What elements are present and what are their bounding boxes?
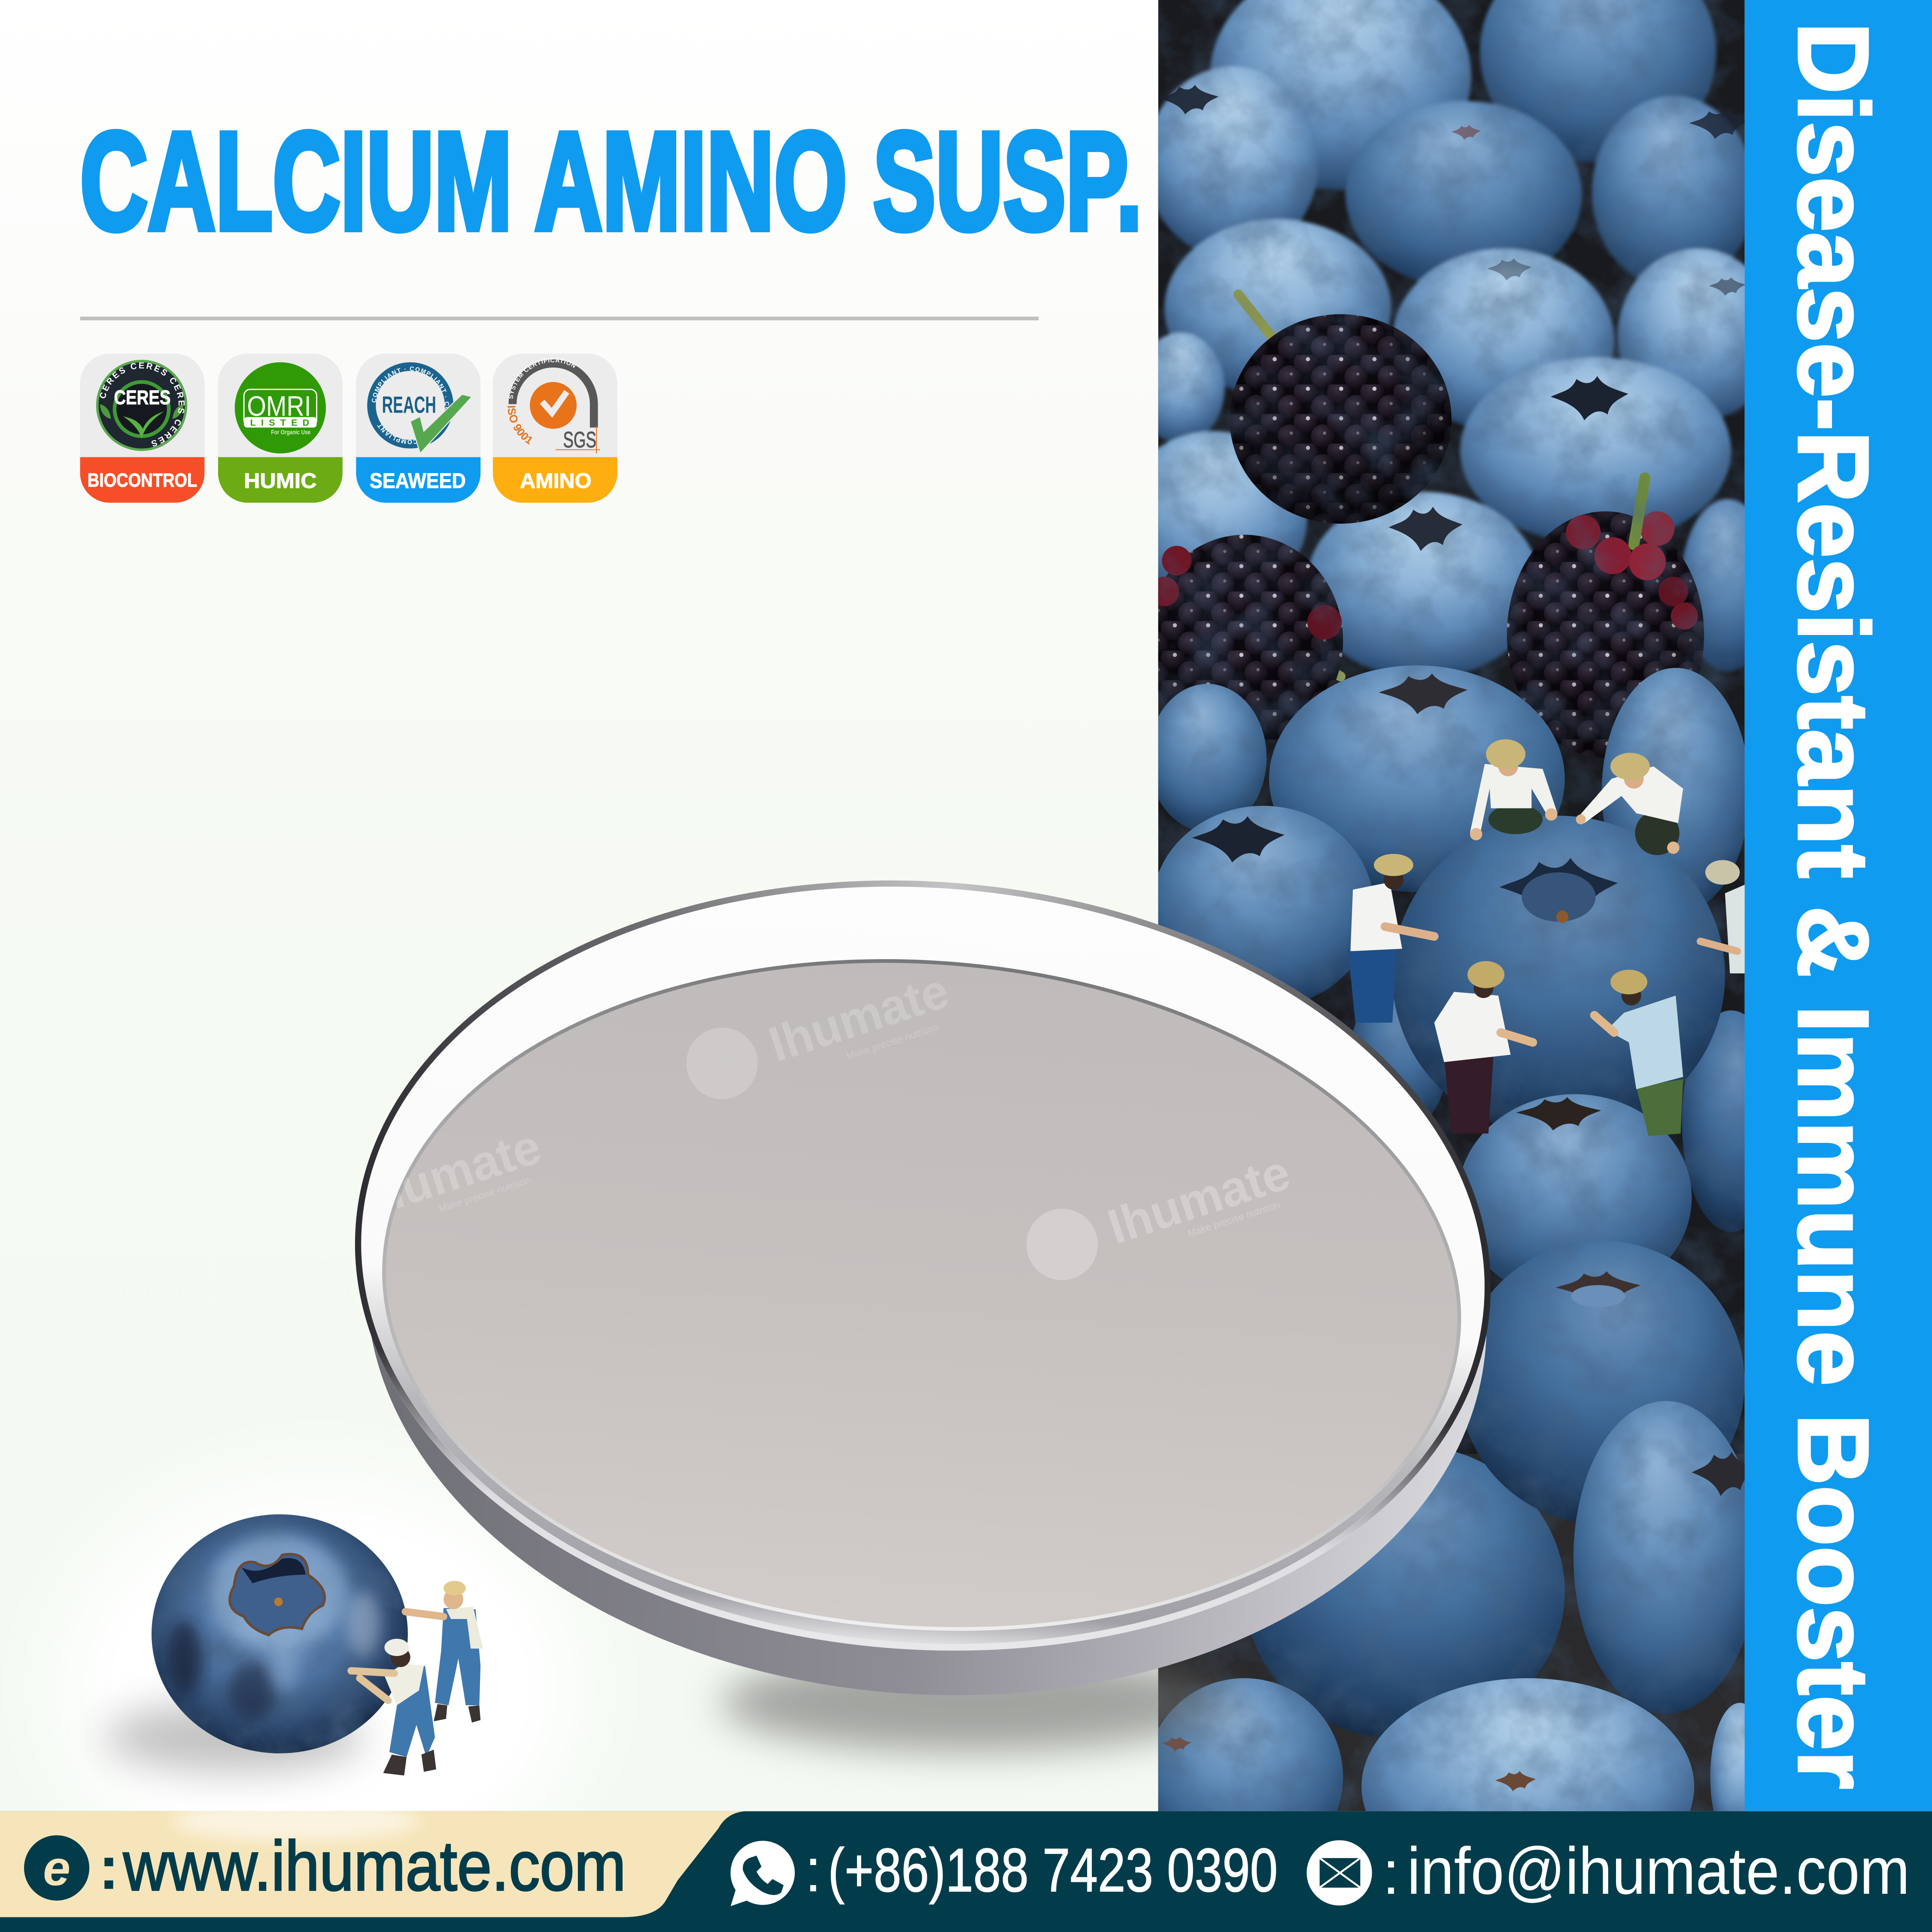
badge: amino xyxy=(493,354,617,503)
sgs seal: SGS xyxy=(563,427,596,452)
ceres seal: CERES CERES CERES CERES xyxy=(98,361,186,449)
footer bar xyxy=(0,1801,1932,1932)
icon: email xyxy=(1307,1840,1372,1905)
watermark top xyxy=(687,963,955,1099)
berry calyx marks xyxy=(1160,85,1758,1791)
panel: blueberry photo xyxy=(1158,0,1745,1811)
watermark top: Make precise nutrition xyxy=(845,1021,940,1062)
sgs seal xyxy=(505,357,600,453)
footer bar: www.ihumate.com xyxy=(123,1826,626,1905)
icon: web: e xyxy=(43,1841,70,1896)
white studio patch behind small blueberry xyxy=(61,1479,579,1898)
badge: humic xyxy=(218,354,343,503)
side banner xyxy=(1745,0,1932,1811)
berry skin mottling xyxy=(1158,0,1745,1811)
title: CALCIUM AMINO SUSP. xyxy=(80,103,1142,259)
middle blueberries xyxy=(1148,665,1780,1301)
email address: : xyxy=(1382,1838,1400,1907)
omri seal xyxy=(235,362,326,453)
watermark right: Ihumate xyxy=(1101,1145,1297,1255)
small blueberry xyxy=(148,1510,413,1756)
dish wall xyxy=(340,880,1513,1732)
badge: biocontrol xyxy=(80,354,204,503)
omri seal: For Organic Use xyxy=(271,429,310,436)
miniature worker five xyxy=(1434,961,1533,1133)
illustration: small blueberry with workers xyxy=(105,1510,483,1776)
miniature worker four xyxy=(1700,860,1745,973)
liquid surface xyxy=(361,926,1482,1665)
watermarks xyxy=(352,963,1297,1280)
front blueberries xyxy=(1146,1241,1769,1895)
omri seal: OMRI xyxy=(247,390,311,422)
lower rim highlight xyxy=(332,846,1513,1685)
website panel xyxy=(0,1811,745,1917)
miniature worker six xyxy=(1595,970,1683,1136)
icon: web xyxy=(24,1835,89,1901)
phone number: : xyxy=(805,1836,822,1905)
glass rim xyxy=(332,846,1513,1685)
omri seal: LISTED xyxy=(250,418,309,428)
footer haze xyxy=(173,1801,419,1841)
blackberry three xyxy=(1507,478,1704,758)
biocontrol label: BIOCONTROL xyxy=(88,470,197,491)
icon: whatsapp phone xyxy=(731,1841,795,1906)
watermark top: Ihumate xyxy=(762,963,955,1072)
miniature worker three xyxy=(1348,854,1434,1023)
watermark left: Ihumate xyxy=(352,1119,547,1229)
watermark right: Make precise nutrition xyxy=(1186,1199,1281,1239)
badge: seaweed xyxy=(356,354,480,503)
sgs seal: ISO 9001 xyxy=(505,405,535,447)
watermark left: Make precise nutrition xyxy=(437,1174,532,1215)
heading divider xyxy=(80,317,1039,320)
back row blueberries xyxy=(1158,0,1745,673)
berry shadow xyxy=(105,1703,364,1772)
dish shadow xyxy=(721,1653,1226,1752)
seaweed label: SEAWEED xyxy=(370,469,466,492)
footer bar: (+86)188 7423 0390 xyxy=(828,1836,1278,1905)
worker standing xyxy=(405,1581,483,1722)
ceres seal: CERES xyxy=(114,386,170,408)
product: petri dish with suspension xyxy=(332,846,1513,1732)
amino label: AMINO xyxy=(520,469,592,492)
blackberry one xyxy=(1230,295,1452,524)
side banner slogan: Disease-Resistant & Immune Booster xyxy=(1777,22,1889,1789)
website text: : xyxy=(99,1834,119,1902)
humic label: HUMIC xyxy=(244,469,317,492)
miniature worker one xyxy=(1470,739,1558,840)
reach seal: COMPLIANT · COMPLIANT · COMPLIANT · COMPLIANT xyxy=(371,366,450,445)
watermark right xyxy=(1027,1145,1297,1280)
miniature worker two xyxy=(1576,753,1683,855)
sgs seal: SYSTEM CERTIFICATION xyxy=(507,357,577,399)
worker kneeling at berry xyxy=(351,1639,436,1776)
blackberry two xyxy=(1146,535,1343,747)
reach seal: REACH xyxy=(382,392,436,418)
